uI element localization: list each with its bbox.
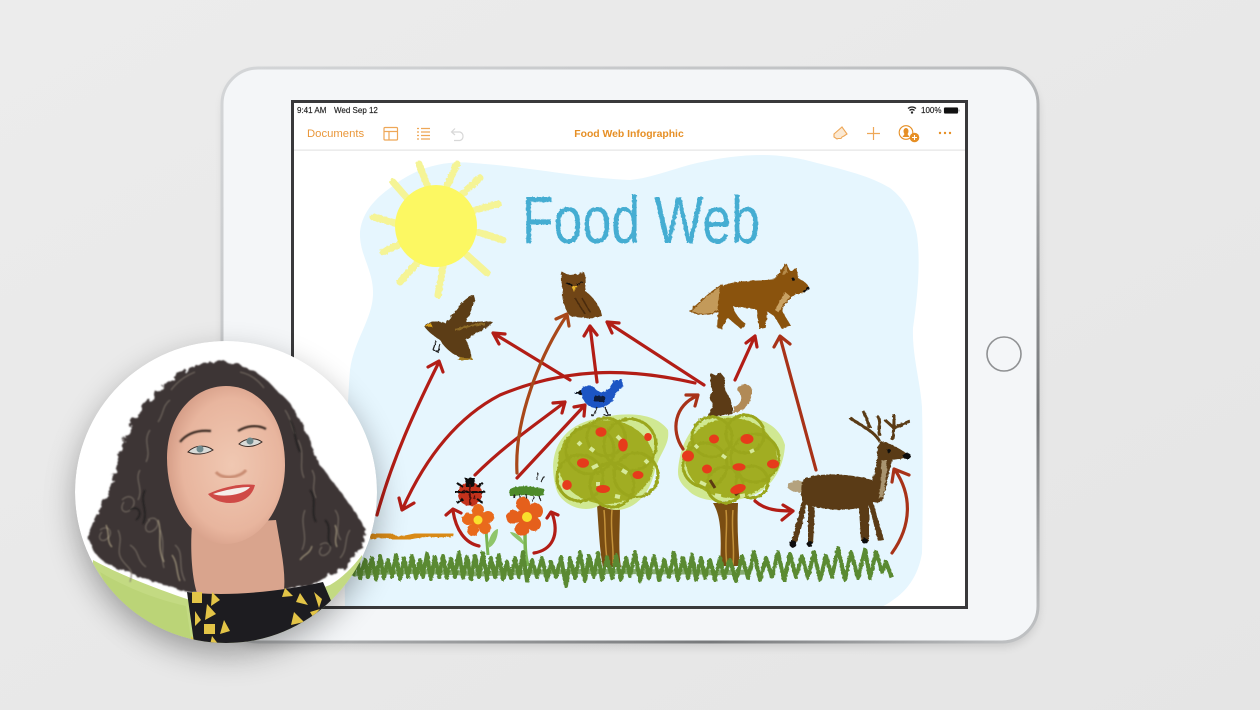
arrow: squirrel to worm xyxy=(399,373,695,510)
arrow: bird to owl xyxy=(584,326,597,382)
arrow: grass to deer xyxy=(892,469,909,553)
infographic scene xyxy=(58,66,1042,672)
neck xyxy=(191,520,284,597)
caterpillar xyxy=(509,473,545,501)
nose xyxy=(216,470,246,477)
hawk xyxy=(424,295,493,360)
view icon xyxy=(384,128,398,140)
apples xyxy=(562,427,652,493)
arrow: squirrel to owl xyxy=(607,322,704,385)
tablet screen xyxy=(292,102,966,620)
title: Food Web: Food Web xyxy=(522,183,760,258)
cardigan xyxy=(90,555,372,650)
hair curls xyxy=(100,372,350,582)
arrow: tree to deer xyxy=(755,501,793,520)
squirrel xyxy=(708,372,752,417)
worm xyxy=(370,534,453,539)
arrow: plant to hawk xyxy=(377,361,443,515)
arrow: squirrel to fox xyxy=(735,336,757,380)
status bar: 9:41 AM xyxy=(297,106,327,115)
tablet body xyxy=(222,68,1038,642)
apples xyxy=(682,434,779,496)
list icon xyxy=(417,128,430,139)
grass xyxy=(353,548,892,586)
status bar: Wed Sep 12 xyxy=(334,106,378,115)
toolbar xyxy=(307,126,951,142)
undo icon xyxy=(452,128,463,140)
arrow: tree to squirrel xyxy=(676,395,698,449)
tablet xyxy=(222,68,1038,646)
eyebrows xyxy=(180,426,266,442)
smile xyxy=(208,484,255,503)
blue bird xyxy=(574,379,623,415)
arrow: ladybug to bird xyxy=(475,402,565,475)
status bar: 100% xyxy=(921,106,941,115)
collaborate icon xyxy=(899,126,919,142)
flower right xyxy=(506,497,543,566)
food web drawing xyxy=(345,155,923,620)
shirt pattern xyxy=(191,588,322,645)
sun xyxy=(373,164,503,295)
more icon xyxy=(939,132,951,134)
arrow: flower to ladybug xyxy=(446,509,479,546)
documents button: Documents xyxy=(307,128,364,140)
sky blob xyxy=(345,155,923,620)
home button xyxy=(987,337,1021,371)
flower left xyxy=(462,504,498,555)
tree: left apple tree xyxy=(553,414,668,567)
add icon xyxy=(867,127,880,140)
tree: right apple tree xyxy=(678,415,785,566)
portrait photo xyxy=(75,341,377,650)
arrow: bird to hawk xyxy=(493,333,570,380)
document title: Food Web Infographic xyxy=(574,129,684,140)
deer xyxy=(787,411,911,548)
status bar xyxy=(297,106,960,115)
arrow: caterpillar to owl xyxy=(517,314,569,473)
arrows xyxy=(377,314,909,553)
face xyxy=(167,386,285,544)
ladybug xyxy=(455,478,485,506)
hair xyxy=(88,362,366,593)
presenter portrait xyxy=(75,341,377,654)
arrow: grass to flower xyxy=(534,512,558,553)
eyes xyxy=(188,438,262,454)
fox xyxy=(690,263,809,329)
shirt xyxy=(187,582,335,650)
portrait shadow xyxy=(76,354,376,654)
arrow: caterpillar to bird xyxy=(517,405,585,478)
format brush icon xyxy=(834,127,847,139)
arrow: deer to fox xyxy=(774,336,816,470)
owl xyxy=(561,272,602,318)
